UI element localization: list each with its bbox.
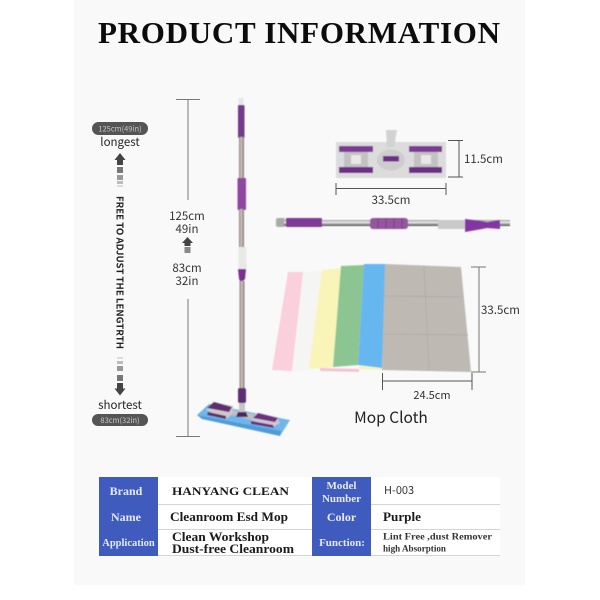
value cells [170, 484, 493, 556]
label: shortest [92, 397, 148, 426]
value cells: HANYANG CLEAN [172, 484, 289, 498]
dimension: 11.5cm: 11.5cm [464, 151, 503, 167]
dimension: 33.5cm head [336, 183, 446, 208]
left clips [339, 146, 373, 152]
value cells: Clean Workshop [172, 529, 269, 544]
vertical text: FREE TO ADJUST THE LENGTRTH [114, 196, 128, 349]
background panel [74, 0, 525, 585]
mop base [197, 404, 290, 436]
dimension line: mop height: 83cm [172, 260, 202, 276]
right clip [251, 413, 280, 427]
header labels: Name [111, 510, 142, 524]
mop photo: standing [197, 98, 290, 436]
dimension line: mop height [169, 100, 205, 436]
length adjustment scale [92, 122, 148, 426]
yellow cloth [309, 268, 341, 369]
header labels: Number [322, 493, 361, 505]
header cells right [312, 477, 371, 556]
handle [238, 98, 244, 106]
dimension: cloth width: 24.5cm [413, 387, 451, 403]
header labels [102, 480, 365, 549]
dimension line: mop height: 49in [176, 221, 198, 237]
mop handle horizontal [276, 218, 510, 232]
mop cloths [272, 264, 471, 372]
dimension: cloth width [382, 373, 472, 403]
arrow up [114, 153, 126, 187]
left clip [206, 402, 234, 419]
header labels: Application [102, 538, 155, 549]
header labels: Brand [110, 484, 143, 498]
arrow down [114, 357, 126, 396]
blue cloth [358, 264, 386, 368]
dimension: cloth height: 33.5cm [481, 302, 520, 318]
title: PRODUCT INFORMATION [98, 15, 500, 50]
white cloth [293, 271, 322, 372]
mop head frame [336, 130, 446, 178]
label: longest: longest [100, 134, 140, 150]
pink cloth [272, 272, 303, 371]
centre joint [377, 150, 405, 170]
right clips [409, 146, 442, 152]
value cells: high Absorption [383, 544, 447, 554]
value cells: Cleanroom Esd Mop [170, 509, 288, 524]
label: shortest: shortest [98, 397, 143, 413]
grey cloth [382, 264, 471, 372]
value cells: Lint Free ,dust Remover [383, 532, 493, 542]
label: longest: 125cm(49in) [98, 124, 142, 134]
dimension: 33.5cm head: 33.5cm [372, 192, 410, 208]
dimension: cloth height [471, 267, 520, 372]
label: shortest: 83cm(32in) [100, 415, 140, 426]
specification table: H-003 [384, 482, 414, 498]
dimension: 11.5cm [448, 140, 503, 177]
header labels: Model [327, 480, 356, 492]
green cloth [333, 265, 364, 367]
caption: mop cloth: Mop Cloth [354, 406, 428, 428]
header labels: Function: [319, 537, 365, 549]
header labels: Color [327, 510, 357, 524]
specification table [99, 477, 500, 556]
value cells: Purple [383, 509, 421, 524]
header cells left [99, 477, 158, 556]
dimension line: mop height: 125cm [169, 208, 205, 224]
dimension line: mop height: 32in [176, 273, 198, 289]
value cells: Dust-free Cleanroom [172, 541, 294, 556]
label: longest [92, 122, 148, 150]
